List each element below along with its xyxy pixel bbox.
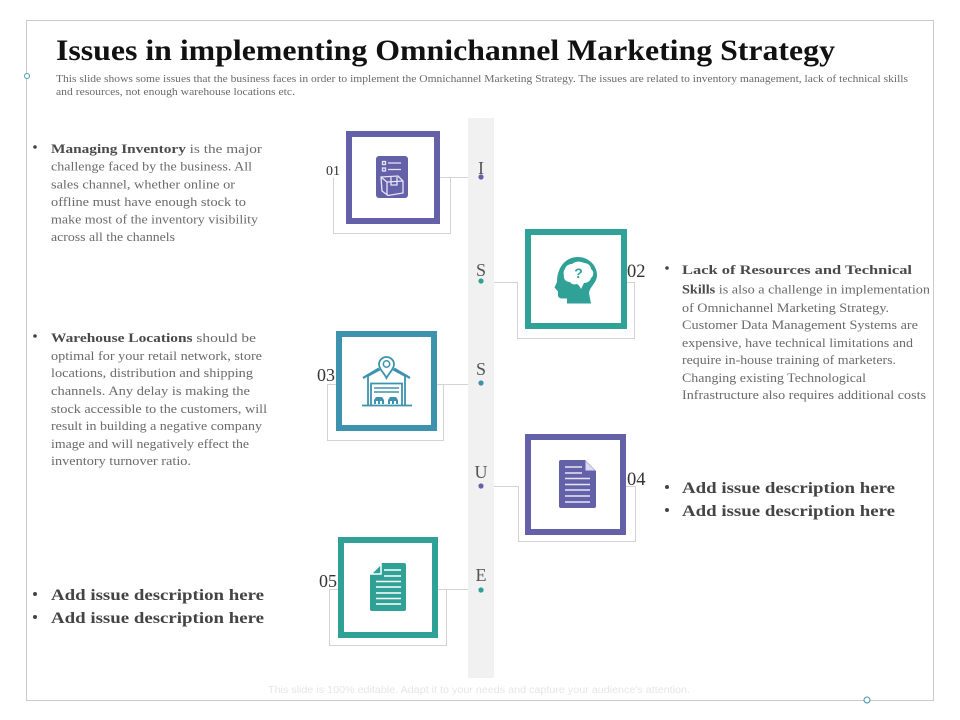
text: managing inventory: challenge faced by the business. All [51, 158, 252, 174]
central ISSUE column: I [478, 158, 484, 178]
text: lack of resources: Lack of Resources and Technical [682, 262, 912, 277]
icon: head with question mark: ? [574, 265, 583, 281]
text: warehouse locations: locations, distribution and shipping [51, 365, 254, 380]
text: warehouse locations: optimal for your retail network, store [51, 348, 262, 363]
subtitle: This slide shows some issues that the business faces in order to implement the Omnichannel Marketing Strategy. The issues are related to inventory management, lack of technical skills [56, 74, 908, 85]
text: add issue description right: Add issue description here [682, 503, 895, 520]
text: managing inventory: across all the channels [51, 229, 175, 244]
issue block 01 [326, 134, 468, 234]
issue block 05: 05 [319, 571, 337, 591]
icon: inventory box [376, 156, 408, 198]
issue block 03: 03 [317, 365, 335, 385]
text: lack of resources: Changing existing Technological [682, 370, 866, 385]
issue block 04 [494, 437, 646, 542]
issue block 04: 04 [627, 470, 646, 490]
text: lack of resources: expensive, have technical limitations and [682, 335, 914, 350]
text: warehouse locations [33, 330, 267, 468]
text: lack of resources [665, 262, 931, 402]
text: add issue description right: Add issue description here [682, 480, 895, 497]
icon: head with question mark [554, 257, 597, 304]
icon: document [559, 460, 596, 508]
issue block 02 [494, 232, 646, 338]
issue block 02: 02 [627, 262, 646, 282]
footer note: This slide is 100% editable. Adapt it to your needs and capture your audience's attention. [268, 685, 690, 696]
text: warehouse locations: channels. Any delay is making the [51, 383, 250, 398]
issue block 05 [319, 540, 468, 646]
text: managing inventory: offline must have enough stock to [51, 194, 246, 209]
central ISSUE column: S [476, 260, 486, 280]
subtitle [56, 74, 908, 98]
text: add issue description left: Add issue description here [51, 587, 264, 604]
text: warehouse locations: stock accessible to the customers, will [51, 401, 267, 416]
text: warehouse locations: inventory turnover ratio. [51, 453, 191, 468]
issue block 01: 01 [326, 164, 340, 179]
text: lack of resources: Skills is also a challenge in implementation [682, 282, 931, 296]
issue block 03 [317, 334, 468, 440]
icon: document [370, 563, 406, 611]
text: add issue description left: Add issue description here [51, 610, 264, 627]
text: lack of resources: require in-house training of marketers. [682, 352, 896, 367]
subtitle: and resources, not enough warehouse locations etc. [56, 87, 295, 98]
icon: warehouse with location pin [362, 357, 412, 406]
text: add issue description right [665, 480, 895, 520]
text: warehouse locations: Warehouse Locations should be [51, 330, 256, 345]
text: managing inventory [33, 141, 263, 244]
text: managing inventory: Managing Inventory is the major [51, 141, 263, 156]
text: lack of resources: of Omnichannel Marketing Strategy. [682, 300, 889, 315]
text: managing inventory: make most of the inventory visibility [51, 212, 259, 226]
text: managing inventory: sales channel, whether online or [51, 176, 236, 192]
central ISSUE column [468, 118, 494, 678]
title: Issues in implementing Omnichannel Marketing Strategy [56, 34, 835, 67]
central ISSUE column: E [476, 565, 486, 585]
text: warehouse locations: image and will negatively effect the [51, 436, 249, 451]
central ISSUE column: S [476, 359, 486, 379]
text: lack of resources: Infrastructure also requires additional costs [682, 387, 926, 402]
central ISSUE column: U [474, 462, 488, 482]
text: warehouse locations: result in building a negative company [51, 418, 263, 433]
text: add issue description left [33, 587, 264, 627]
text: lack of resources: Customer Data Management Systems are [682, 317, 918, 332]
